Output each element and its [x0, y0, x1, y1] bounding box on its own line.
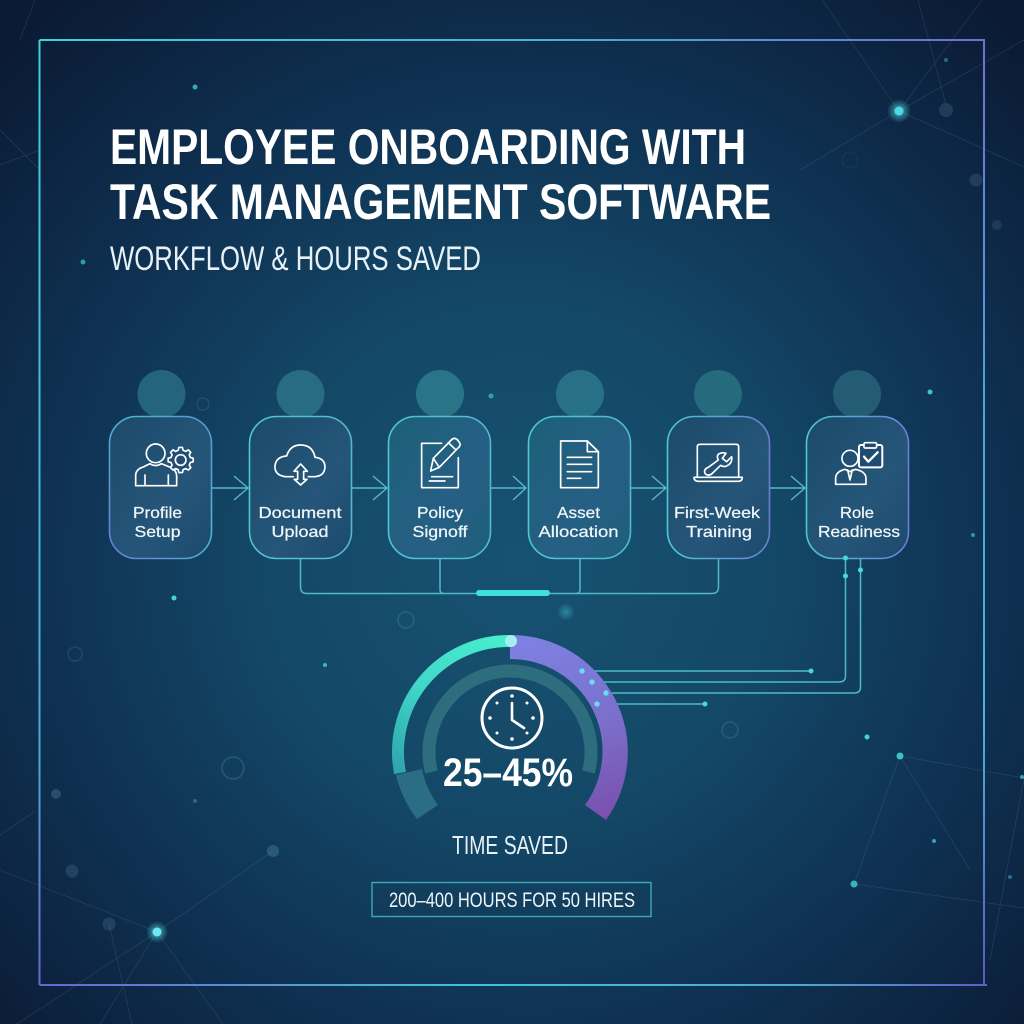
label	[538, 505, 618, 541]
connector lines: readiness to gauge	[582, 556, 863, 706]
arrow: document to policy	[352, 476, 387, 500]
title: TASK MANAGEMENT SOFTWARE	[110, 174, 771, 230]
label: Document	[258, 505, 342, 522]
callout: hours saved	[372, 882, 651, 916]
subtitle: WORKFLOW & HOURS SAVED	[110, 240, 481, 278]
title	[110, 119, 771, 230]
label: Profile	[133, 505, 182, 522]
label	[412, 505, 468, 541]
step: Asset Allocation	[528, 370, 630, 558]
arrow: policy to asset	[491, 476, 526, 500]
glowing node bottom left	[146, 921, 168, 943]
icon: clock	[482, 688, 542, 748]
label	[818, 505, 900, 541]
step: Role Readiness	[806, 370, 908, 558]
gauge caption: TIME SAVED	[452, 830, 568, 860]
label: Signoff	[412, 524, 468, 541]
step: Policy Signoff	[388, 370, 490, 558]
label: Setup	[134, 524, 181, 541]
arrow: profile to document	[212, 476, 248, 500]
gauge	[396, 635, 628, 820]
arrow: asset to training	[630, 476, 666, 500]
gauge connector dots	[579, 668, 609, 707]
gauge teal arc	[398, 641, 510, 773]
label: First-Week	[674, 505, 761, 522]
label	[133, 505, 182, 541]
label: Allocation	[538, 524, 618, 541]
label: Readiness	[818, 524, 900, 541]
label: Training	[686, 524, 752, 541]
icon: document	[561, 441, 598, 488]
gauge value: 25–45%	[443, 751, 573, 795]
step: Document Upload	[250, 370, 352, 558]
step: First-Week Training	[668, 370, 770, 558]
gauge purple arc	[510, 635, 628, 820]
glowing node top right	[887, 99, 911, 123]
icon: person with clipboard	[836, 443, 882, 484]
step: Profile Setup	[110, 370, 212, 558]
connector bus below cards	[300, 559, 718, 596]
label	[674, 505, 761, 541]
callout: hours saved: 200–400 HOURS FOR 50 HIRES	[389, 889, 635, 912]
label: Asset	[557, 505, 601, 522]
gauge dim segment	[396, 769, 438, 819]
title: EMPLOYEE ONBOARDING WITH	[110, 119, 746, 175]
icon: person with gear	[136, 444, 193, 486]
label: Policy	[417, 505, 463, 522]
label	[258, 505, 342, 541]
gauge inner track	[429, 671, 591, 772]
label: Role	[840, 505, 874, 522]
label: Upload	[272, 524, 328, 541]
icon: cloud upload	[275, 445, 325, 485]
icon: laptop with wrench	[694, 444, 742, 481]
gauge knob	[505, 635, 517, 647]
icon: document with pen	[422, 438, 460, 488]
arrow: training to readiness	[769, 476, 805, 500]
